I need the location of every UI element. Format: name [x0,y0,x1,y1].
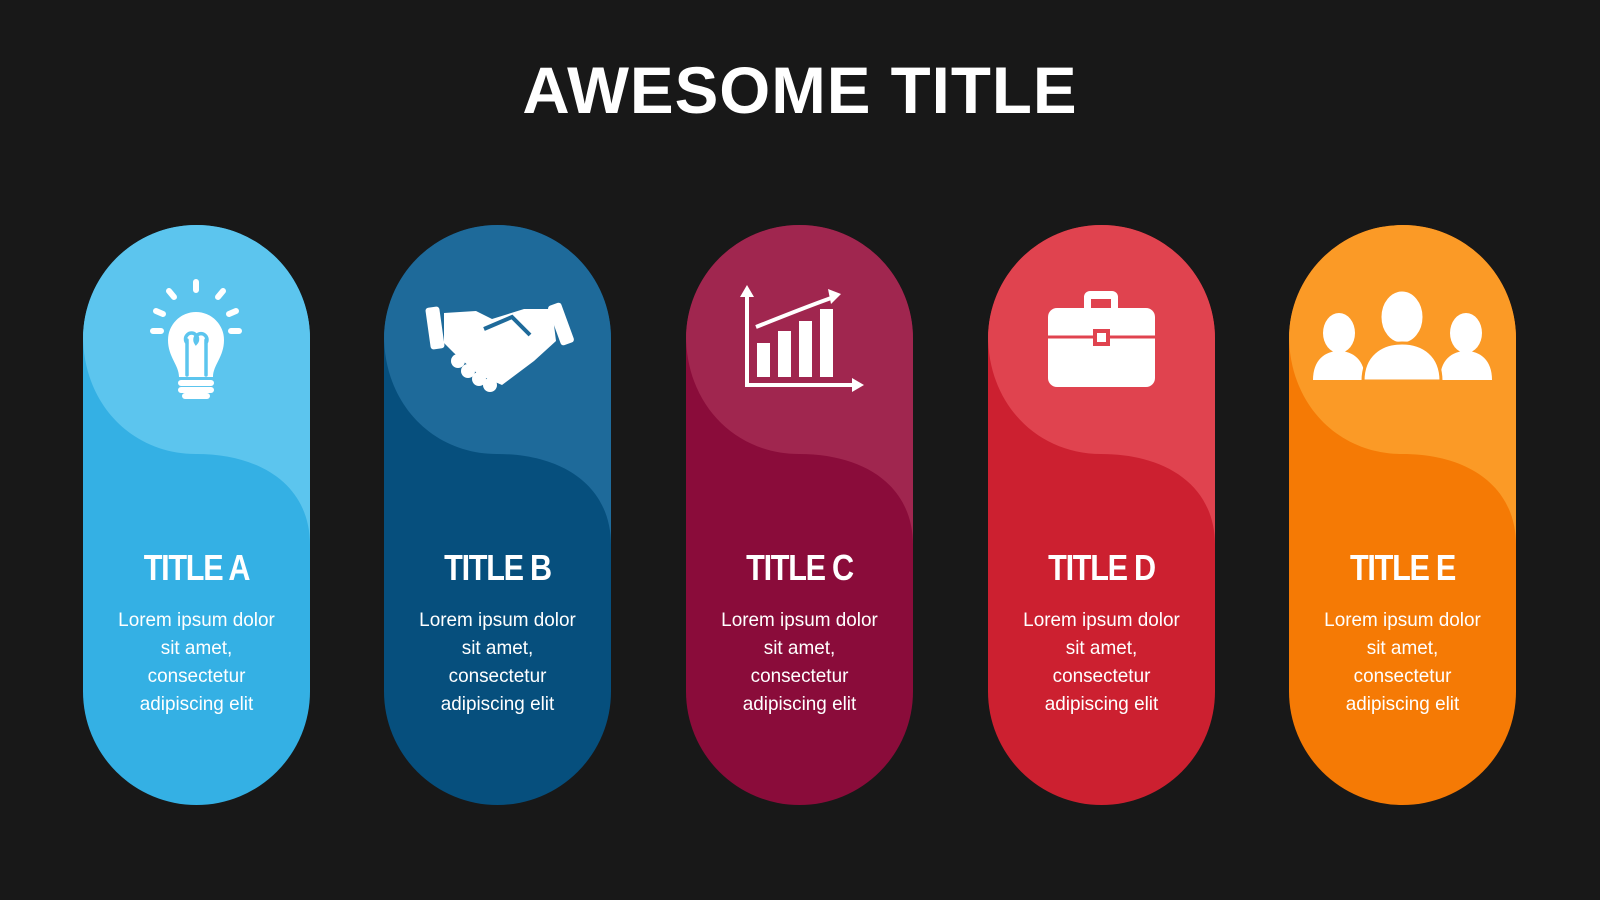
panel: title C [686,225,913,805]
icon: handshake [425,302,575,392]
panel: title A: adipiscing elit [140,693,253,715]
panel: title D [988,225,1215,805]
icon: people [1313,290,1492,381]
panel: title C: sit amet, [764,637,835,659]
icon: light bulb [153,282,239,396]
panel: title E: Lorem ipsum dolor [1324,609,1481,631]
panel: title B: consectetur [449,665,546,687]
panel: title A: sit amet, [161,637,232,659]
panel: title E: TITLE E [1350,547,1455,588]
panel: title C: adipiscing elit [743,693,856,715]
panel: title D: TITLE D [1048,547,1155,588]
panel: title B [384,225,611,805]
icon: bar chart [740,285,864,392]
panel: title B: sit amet, [462,637,533,659]
title: AWESOME TITLE [522,54,1078,127]
panel: title A: Lorem ipsum dolor [118,609,275,631]
panel: title E: sit amet, [1367,637,1438,659]
panel: title D: Lorem ipsum dolor [1023,609,1180,631]
panel: title A [83,225,310,805]
panel: title E: adipiscing elit [1346,693,1459,715]
panel: title A: TITLE A [144,547,249,588]
panel: title C: Lorem ipsum dolor [721,609,878,631]
panel: title E: consectetur [1354,665,1451,687]
panel: title E [1289,225,1516,805]
panel: title C: TITLE C [746,547,853,588]
panel: title D: sit amet, [1066,637,1137,659]
panel: title B: Lorem ipsum dolor [419,609,576,631]
panel: title D: adipiscing elit [1045,693,1158,715]
panel: title D: consectetur [1053,665,1150,687]
icon: briefcase [1048,291,1155,387]
panel: title B: adipiscing elit [441,693,554,715]
panel: title A: consectetur [148,665,245,687]
panel: title C: consectetur [751,665,848,687]
panel: title B: TITLE B [444,547,551,588]
